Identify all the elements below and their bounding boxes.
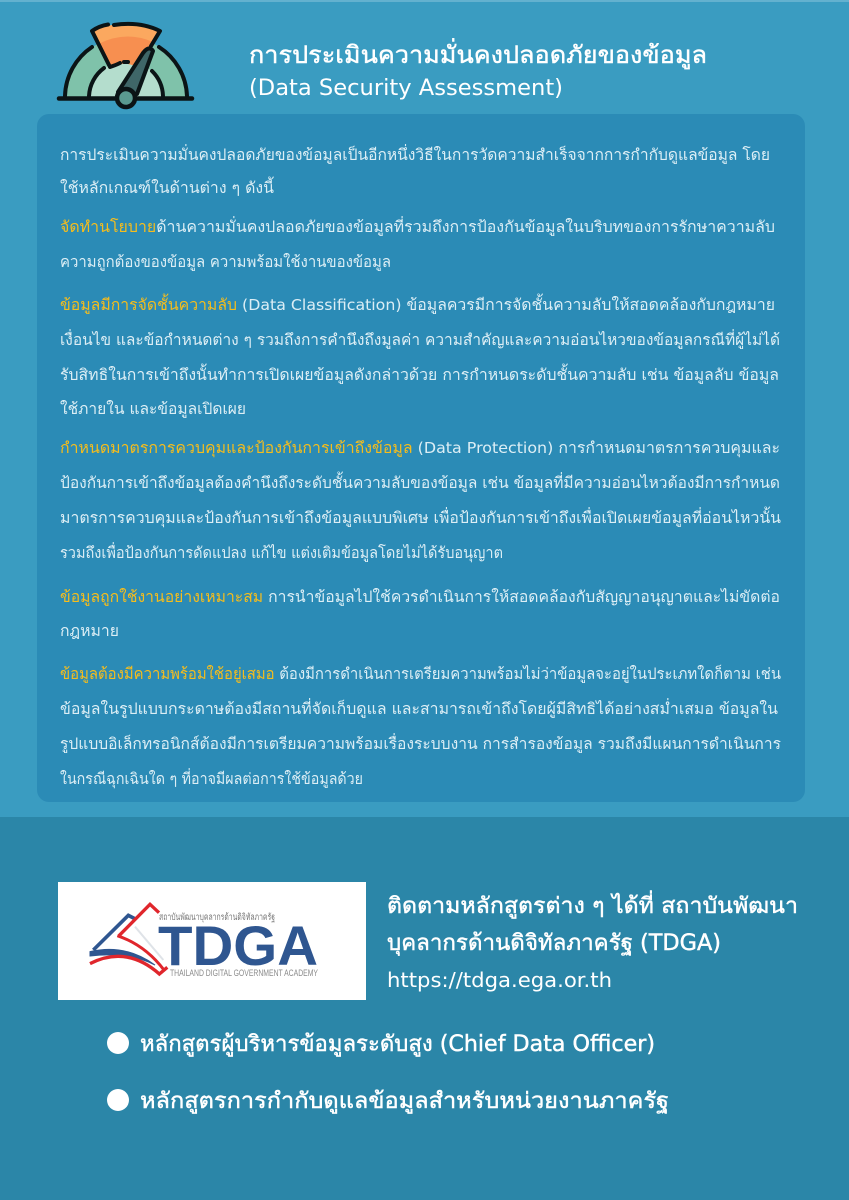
text: appropriate use	[60, 588, 780, 640]
course item: Chief Data Officer: หลักสูตรผู้บริหารข้อมูลระดับสูง (Chief Data Officer)	[140, 1032, 655, 1057]
text: follow courses	[387, 890, 798, 992]
text: follow courses: https://tdga.ega.or.th	[387, 968, 612, 992]
text: policy: จัดทำนโยบายด้านความมั่นคงปลอดภัยของข้อมูลที่รวมถึงการป้องกันข้อมูลในบริบทของการรักษาความลับ	[60, 216, 775, 237]
logo: TDGA	[58, 882, 366, 1000]
text: data classification: เงื่อนไข และข้อกำหนดต่าง ๆ รวมถึงการคำนึงถึงมูลค่า ความสำคัญและความอ่อนไหวของข้อมูลกรณีที่ผู้ไม่ได้	[60, 329, 780, 350]
text: introduction	[60, 144, 770, 197]
panel: assessment criteria	[37, 114, 805, 802]
title: การประเมินความมั่นคงปลอดภัยของข้อมูล	[249, 38, 707, 70]
panel: footer	[0, 817, 849, 1200]
logo: TDGA: THAILAND DIGITAL GOVERNMENT ACADEMY	[170, 968, 318, 978]
logo: TDGA: TDGA	[158, 914, 318, 977]
text: data classification: รับสิทธิในการเข้าถึงนั้นทำการเปิดเผยข้อมูลดังกล่าวด้วย การกำหนดระดับชั้นความลับ เช่น ข้อมูลลับ ข้อมูล	[60, 363, 779, 385]
text: appropriate use: กฎหมาย	[60, 622, 119, 640]
title	[249, 38, 707, 101]
text: data classification: ใช้ภายใน และข้อมูลเปิดเผย	[60, 400, 246, 419]
text: data classification: ข้อมูลมีการจัดชั้นความลับ (Data Classification) ข้อมูลควรมีการจัดชั้นความลับให้สอดคล้องกับกฎหมาย	[60, 293, 775, 315]
text: availability: ข้อมูลต้องมีความพร้อมใช้อยู่เสมอ ต้องมีการดำเนินการเตรียมความพร้อมไม่ว่าข้อมูลจะอยู่ในประเภทใดก็ตาม เช่น	[60, 664, 781, 684]
text: data protection: มาตรการควบคุมและป้องกันการเข้าถึงข้อมูลแบบพิเศษ เพื่อป้องกันการเข้าถึงเพื่อเปิดเผยข้อมูลที่อ่อนไหวนั้น	[60, 506, 781, 528]
text: policy: ความถูกต้องของข้อมูล ความพร้อมใช้งานของข้อมูล	[60, 253, 391, 272]
text: availability: ในกรณีฉุกเฉินใด ๆ ที่อาจมีผลต่อการใช้ข้อมูลด้วย	[60, 768, 363, 789]
title: (Data Security Assessment)	[249, 76, 563, 101]
course item: government data governance: หลักสูตรการกำกับดูแลข้อมูลสำหรับหน่วยงานภาครัฐ	[140, 1089, 669, 1114]
icon: security gauge	[59, 23, 192, 107]
text: data classification	[60, 293, 780, 419]
text: introduction: การประเมินความมั่นคงปลอดภัยของข้อมูลเป็นอีกหนึ่งวิธีในการวัดความสำเร็จจากการกำกับดูแลข้อมูล โดย	[60, 144, 770, 165]
text: availability: รูปแบบอิเล็กทรอนิกส์ต้องมีการเตรียมความพร้อมเรื่องระบบงาน การสำรองข้อมูล รวมถึงมีแผนการดำเนินการ	[60, 733, 781, 754]
text: data protection: ป้องกันการเข้าถึงข้อมูลต้องคำนึงถึงระดับชั้นความลับของข้อมูล เช่น ข้อมูลที่มีความอ่อนไหวต้องมีการกำหนด	[60, 471, 780, 493]
logo: TDGA: สถาบันพัฒนาบุคลากรด้านดิจิทัลภาครัฐ	[159, 912, 275, 923]
text: policy	[60, 216, 775, 272]
text: data protection	[60, 439, 781, 563]
text: data protection: กำหนดมาตรการควบคุมและป้องกันการเข้าถึงข้อมูล (Data Protection) การกำหนดมาตรการควบคุมและ	[60, 439, 780, 458]
text: availability	[60, 664, 781, 789]
text: follow courses: บุคลากรด้านดิจิทัลภาครัฐ (TDGA)	[387, 931, 721, 956]
text: follow courses: ติดตามหลักสูตรต่าง ๆ ได้ที่ สถาบันพัฒนา	[387, 890, 798, 919]
text: appropriate use: ข้อมูลถูกใช้งานอย่างเหมาะสม การนำข้อมูลไปใช้ควรดำเนินการให้สอดคล้องกับสัญญาอนุญาตและไม่ขัดต่อ	[60, 588, 780, 607]
text: data protection: รวมถึงเพื่อป้องกันการดัดแปลง แก้ไข แต่งเติมข้อมูลโดยไม่ได้รับอนุญาต	[60, 542, 503, 563]
text: availability: ข้อมูลในรูปแบบกระดาษต้องมีสถานที่จัดเก็บดูแล และสามารถเข้าถึงโดยผู้มีสิทธิได้อย่างสม่ำเสมอ ข้อมูลใน	[60, 698, 778, 719]
text: introduction: ใช้หลักเกณฑ์ในด้านต่าง ๆ ดังนี้	[60, 176, 274, 197]
